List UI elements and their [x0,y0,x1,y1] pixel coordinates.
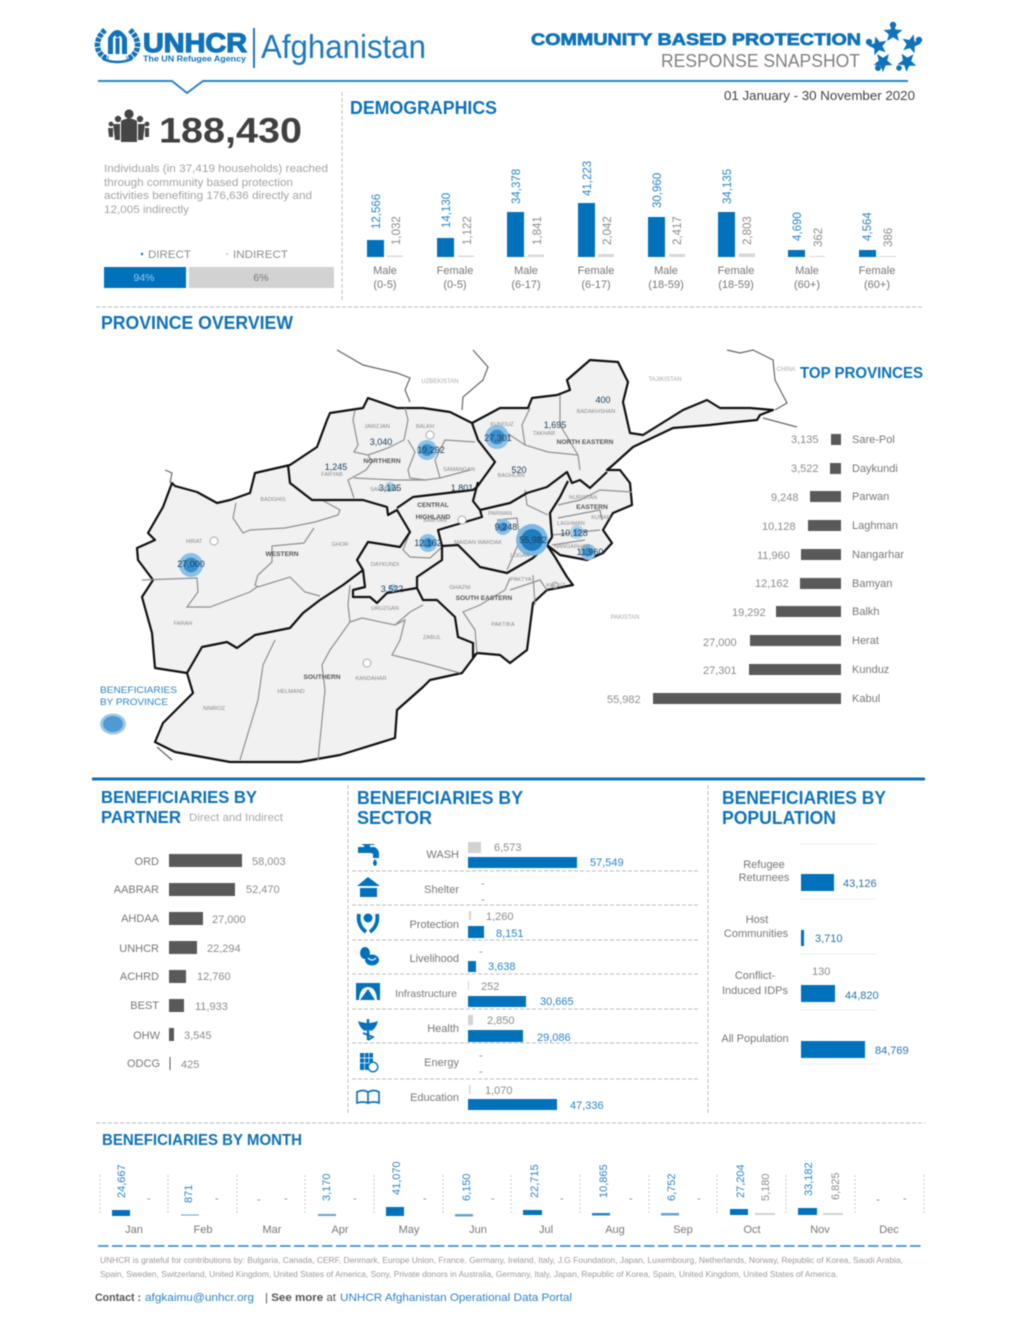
age and sex labels: (6-17) [511,279,541,291]
province beneficiary numbers: 1,801 [451,483,473,493]
footer: contact: afgkaimu@unhcr.org [145,1292,254,1304]
population group names: All Population [721,1033,789,1045]
panel: beneficiaries by partner [101,787,286,1071]
panel: top provinces [607,365,923,706]
icon: energy [360,1053,378,1072]
monthly indirect values [760,1172,842,1201]
province labels: BAMYAN [423,518,447,524]
heading: by partner: PARTNER [101,807,181,827]
month names: Apr [331,1224,349,1236]
footer: contact [95,1292,572,1304]
province values: 55,982 [607,694,641,706]
age and sex labels: (18-59) [718,279,754,291]
province values: 19,292 [732,607,766,619]
province names: Nangarhar [852,549,904,561]
partner values: 27,000 [212,914,246,926]
age and sex labels: Male [795,265,819,277]
sector direct values [479,857,624,1112]
empty month markers: - [257,1194,261,1206]
heading: top provinces: TOP PROVINCES [800,365,923,382]
province beneficiary numbers: 3,522 [381,584,403,594]
stacked bar: direct vs indirect: 6% [253,272,269,284]
bar chart: top provinces [653,434,841,704]
population group names: Communities [724,928,789,940]
partner values: 11,933 [195,1001,228,1013]
monthly direct values: 10,865 [598,1164,610,1198]
province names [852,434,904,705]
sector direct values: 47,336 [570,1100,604,1112]
province beneficiary numbers: 11,960 [577,547,603,557]
population group names: Refugee [743,859,785,871]
monthly indirect values: 5,180 [760,1173,772,1201]
indirect values [391,216,895,247]
neighbouring country borders [157,350,797,760]
province labels: KHOST [546,583,566,589]
heading: by sector: SECTOR [357,808,432,828]
region labels: CENTRAL [417,502,449,509]
partner names: AABRAR [114,884,159,896]
sector names: Health [427,1023,459,1035]
region labels: SOUTHERN [304,674,341,681]
province values: 9,248 [771,492,799,504]
region labels: WESTERN [266,551,299,558]
sector indirect values: 1,070 [485,1085,513,1097]
province names: Balkh [852,606,880,618]
direct values: 34,378 [511,169,523,204]
stacked bar: direct vs indirect [104,267,334,288]
province values: 3,135 [791,434,819,446]
empty month markers: - [876,1194,880,1206]
population group names: Returnees [739,872,790,884]
neighbouring country labels [421,367,795,621]
month names: Sep [673,1224,693,1236]
sector names: Infrastructure [395,988,457,1000]
province names: Herat [852,635,879,647]
icon: health [358,1019,378,1040]
region boundaries [187,423,607,673]
population values: 130 [812,966,830,978]
footer: contact: | See more at [265,1292,336,1304]
sector direct values: 29,086 [537,1032,571,1044]
sector indirect values: - [479,946,483,958]
sector names: Education [410,1092,459,1104]
monthly indirect values: 6,825 [830,1172,842,1200]
icon: people [108,109,149,142]
province beneficiary numbers: 27,301 [484,433,512,443]
province values: 10,128 [762,521,796,533]
legend: beneficiaries by province [100,685,177,734]
panel: beneficiaries by population [721,788,909,1064]
icon: livelihood [360,947,379,966]
province beneficiary numbers [177,395,611,594]
direct values: 4,564 [862,212,874,241]
empty month markers: - [903,1193,907,1205]
partner names: AHDAA [121,913,160,925]
direct values: 41,223 [582,161,594,196]
heading: by partner: Direct and Indirect [189,812,283,824]
province labels: NIMROZ [203,706,226,712]
province labels: BADAKHSHAN [577,409,615,415]
monthly direct values: 3,170 [321,1173,333,1201]
bar chart: sector direct [468,857,577,1110]
province labels: GHAZNI [449,585,471,591]
indirect values: 386 [883,228,895,247]
province values: 11,960 [757,550,790,562]
province labels: MAIDAN WARDAK [454,540,502,546]
age and sex labels: (18-59) [648,279,684,291]
direct values: 34,135 [722,169,734,204]
heading: by sector: BENEFICIARIES BY [357,788,523,808]
sector indirect values: 252 [481,981,499,993]
panel: beneficiaries by month [100,1132,924,1236]
sector indirect values: 6,573 [494,842,522,854]
footer: donors: UNHCR is grateful for contributions by: Bulgaria, Canada, CERF, Denmark, Europe Union, France, Germany, Ireland, Italy, J.G Foundation, Japan, Luxembourg, Netherlands, Norway, Republic of Korea, Saudi Arabia, [100,1256,903,1265]
province labels: BAGHLAN [498,473,524,479]
partner names: BEST [130,1000,159,1012]
indirect values: 1,032 [391,216,403,245]
province beneficiary numbers: 520 [511,465,527,475]
partner names: OHW [133,1030,161,1042]
sector names [395,849,459,1104]
footer: donors: Spain, Sweden, Switzerland, United Kingdom, United States of America, Sony, Private donors in Australia, Germany, Italy, Japan, Republic of Korea, Spain, United Kingdom, United States of America. [100,1270,838,1279]
sector direct values: 30,665 [540,996,574,1008]
heading: by population [722,788,886,828]
month names: Jan [125,1224,143,1236]
heading: by partner [101,787,283,827]
region labels: HIGHLAND [416,514,451,521]
province names: Laghman [852,520,898,532]
sector indirect values: 1,260 [486,911,514,923]
description text: Individuals (in 37,419 households) reached [104,163,328,175]
population values: 43,126 [843,878,877,890]
population values: 44,820 [845,990,879,1002]
monthly direct values: 22,715 [529,1164,541,1198]
province labels: URUZGAN [371,606,399,612]
province beneficiary numbers: 27,000 [177,559,205,569]
indirect values: 1,841 [532,216,544,245]
legend: beneficiaries by province: BY PROVINCE [100,697,168,708]
heading: by sector [357,788,523,828]
age and sex labels: (60+) [794,279,820,291]
empty month markers [147,1193,907,1206]
empty month markers: - [147,1193,151,1205]
direct values: 14,130 [441,193,453,228]
age and sex labels: Female [718,265,754,277]
month names [125,1224,899,1236]
sector direct values: 3,638 [488,961,516,973]
province names: Daykundi [852,463,898,475]
month names: May [399,1224,420,1236]
indirect values: 2,042 [602,216,614,245]
month names: Jun [469,1224,487,1236]
age and sex labels: Male [373,265,397,277]
legend: direct and indirect: INDIRECT [233,249,288,261]
partner names: ORD [135,856,159,868]
partner names [114,856,161,1070]
footer: contact: Contact : [95,1292,141,1304]
partner names: UNHCR [119,943,159,955]
province names: Kabul [852,693,880,705]
direct values: 30,960 [652,173,664,208]
province labels: LAGHMAN [557,521,585,527]
title: community based protection: COMMUNITY BASED PROTECTION [531,30,861,49]
partner values: 3,545 [184,1030,212,1042]
empty month markers: - [284,1193,288,1205]
province beneficiary numbers: 400 [595,395,611,405]
population group names [721,859,790,1045]
bar chart: population [801,874,865,1058]
province values: 27,301 [703,665,737,677]
province labels: NANGARHAR [554,544,590,550]
footer: donors [100,1256,903,1279]
logo wordmark: UNHCR [143,28,247,58]
heading: by partner: BENEFICIARIES BY [101,787,257,807]
neighbouring country labels: CHINA [777,367,795,373]
heading: by month: BENEFICIARIES BY MONTH [102,1132,302,1149]
province beneficiary numbers: 1,245 [325,462,347,472]
province labels: FARAH [174,621,192,627]
age and sex labels: (60+) [864,279,890,291]
sector names: Energy [424,1057,459,1069]
province labels: KUNAR [591,515,611,521]
age and sex labels: (6-17) [581,279,611,291]
partner values: 22,294 [207,943,241,955]
province labels: SAMANGAN [443,467,475,473]
sector indirect values [479,842,522,1097]
age and sex labels: (0-5) [373,279,397,291]
monthly direct values: 6,752 [666,1173,678,1201]
header [97,22,923,103]
age and sex labels: Male [654,265,678,277]
region labels: EASTERN [576,504,608,511]
province beneficiary numbers: 10,128 [560,528,588,538]
description text [104,163,328,216]
province labels: GHOR [332,542,348,548]
region labels: NORTHERN [363,458,401,465]
sector names: WASH [426,849,459,861]
partner values [181,856,286,1071]
population group names: Conflict- [735,970,776,982]
province beneficiary numbers: 3,040 [370,437,392,447]
sector direct values: 8,151 [496,928,524,940]
logo divider [253,28,255,68]
province labels: TAKHAR [533,431,555,437]
monthly direct values: 41,070 [391,1161,403,1195]
direct values: 12,566 [371,194,383,229]
panel: demographics [350,98,896,291]
indirect values: 2,417 [672,216,684,245]
population group names: Host [746,914,768,926]
monthly direct values: 24,667 [116,1164,128,1198]
month names: Feb [194,1224,212,1236]
direct values [371,161,874,241]
province labels: PAKTYA [510,577,532,583]
region labels: NORTH EASTERN [557,439,614,446]
province beneficiary numbers: 9,248 [495,522,517,532]
sector direct values: - [481,894,485,906]
month names: Mar [263,1224,282,1236]
bar chart: partners [169,854,242,1070]
partner names: ODCG [127,1058,160,1070]
province beneficiary numbers: 19,292 [417,445,445,455]
heading: demographics: DEMOGRAPHICS [350,98,497,118]
direct values: 4,690 [792,212,804,241]
sector direct values: - [479,1066,483,1078]
empty month markers: - [423,1193,427,1205]
icon: WASH tap [358,844,379,866]
map: Afghanistan provinces [137,350,797,762]
province labels: BALKH [416,424,434,430]
age and sex labels: Female [859,265,895,277]
province labels: PARWAN [488,511,512,517]
legend: beneficiaries by province: BENEFICIARIES [100,685,177,696]
province names: Parwan [852,491,889,503]
panel: headline total [104,109,334,288]
neighbouring country labels: PAKISTAN [611,615,639,621]
sector direct values: 57,549 [590,857,624,869]
panel: beneficiaries by sector [352,788,699,1112]
partner names: ACHRD [120,971,159,983]
icon: shelter [357,877,380,897]
empty month markers: - [560,1193,564,1205]
region labels: SOUTH EASTERN [456,595,512,602]
sector indirect values: - [481,878,485,890]
bar chart: grey indirect bars [387,254,896,257]
indirect values: 1,122 [462,216,474,245]
indirect values: 2,803 [742,216,754,245]
monthly direct values: 6,150 [461,1173,473,1201]
province labels: ZABUL [423,635,441,641]
sector indirect values: 2,850 [487,1015,515,1027]
monthly direct values: 871 [183,1185,195,1203]
population group names: Induced IDPs [722,985,789,997]
stacked bar: direct vs indirect: 94% [133,272,155,284]
age and sex labels: (0-5) [443,279,467,291]
sector names: Protection [409,919,459,931]
indirect values: 362 [813,228,825,247]
age and sex labels: Female [578,265,614,277]
partner values: 58,003 [252,856,286,868]
bar chart: blue direct bars [367,203,876,257]
empty month markers: - [215,1193,219,1205]
month names: Dec [879,1224,899,1236]
legend: direct and indirect: DIRECT [148,249,191,261]
month names: Nov [810,1224,830,1236]
heading: by population: POPULATION [722,808,836,828]
population values: 84,769 [875,1045,909,1057]
monthly direct values [116,1161,815,1203]
province beneficiary numbers: 12,162 [414,538,442,548]
bar chart: monthly direct [112,1207,817,1216]
heading: province overview: PROVINCE OVERVIEW [101,313,293,333]
description text: activities benefiting 176,636 directly and [104,190,312,202]
province beneficiary numbers: 3,135 [379,483,401,493]
header rule with chevron [98,81,908,93]
empty month markers: - [353,1193,357,1205]
province labels: SAR-E-PUL [370,487,400,493]
neighbouring country labels: TAJIKISTAN [648,377,682,383]
province labels: KUNDUZ [490,422,514,428]
date range: 01 January - 30 November 2020 [724,89,915,103]
empty month markers: - [697,1193,701,1205]
province labels: FARYAB [321,472,343,478]
population values [812,878,909,1057]
empty month markers: - [629,1193,633,1205]
province labels: BADGHIS [260,497,286,503]
age and sex labels [373,265,895,291]
region labels [266,439,614,681]
neighbouring country labels: UZBEKISTAN [421,379,459,385]
sector names: Shelter [424,884,459,896]
population values: 3,710 [815,933,843,945]
province labels: LOGAR [510,553,530,559]
partner values: 52,470 [246,884,280,896]
city markers [210,431,558,667]
sector names: Livelihood [409,953,459,965]
bar chart: sector indirect [468,842,481,1094]
subtitle: RESPONSE SNAPSHOT [661,51,860,71]
province labels: KANDAHAR [355,676,387,682]
monthly direct values: 27,204 [735,1164,747,1198]
title: country: Afghanistan [261,28,426,65]
province beneficiary numbers: 55,982 [519,535,547,545]
logo wordmark: The UN Refugee Agency [143,54,247,64]
province labels: JAWZJAN [364,424,390,430]
province names: Sare-Pol [852,434,895,446]
footer: contact: UNHCR Afghanistan Operational Data Portal [340,1292,572,1304]
icon: people stars [866,22,923,74]
province labels: HELMAND [277,689,305,695]
province labels: PAKTIKA [491,622,515,628]
icon: infrastructure [356,983,380,1000]
province names: Bamyan [852,578,892,590]
month names: Jul [539,1224,553,1236]
icon: UNHCR emblem [97,30,138,62]
description text: 12,005 indirectly [104,204,190,216]
province values: 3,522 [791,463,819,475]
province values: 27,000 [703,637,737,649]
monthly direct values: 33,182 [803,1162,815,1196]
age and sex labels: Female [437,265,473,277]
partner values: 12,760 [197,971,231,983]
province names: Kunduz [852,664,889,676]
month names: Oct [743,1224,761,1236]
description text: through community based protection [104,177,293,189]
total beneficiaries number: 188,430 [159,112,302,150]
bubbles: beneficiaries by province [179,425,596,592]
country outline [137,360,773,762]
province labels: NURISTAN [569,495,597,501]
bar chart: monthly indirect [755,1213,843,1215]
sector indirect values: - [479,1050,483,1062]
province beneficiary numbers: 1,695 [544,420,566,430]
heading: by population: BENEFICIARIES BY [722,788,886,808]
month names: Aug [605,1224,625,1236]
icon: protection [359,914,377,932]
province labels [174,409,615,712]
empty month markers: - [491,1193,495,1205]
province boundaries [142,395,632,760]
legend: direct and indirect [141,249,288,261]
province values [607,434,819,706]
age and sex labels: Male [514,265,538,277]
icon: education [357,1090,379,1103]
province labels: HIRAT [186,539,203,545]
province labels: DAYKUNDI [371,562,400,568]
partner values: 425 [181,1059,199,1071]
province values: 12,162 [755,578,789,590]
